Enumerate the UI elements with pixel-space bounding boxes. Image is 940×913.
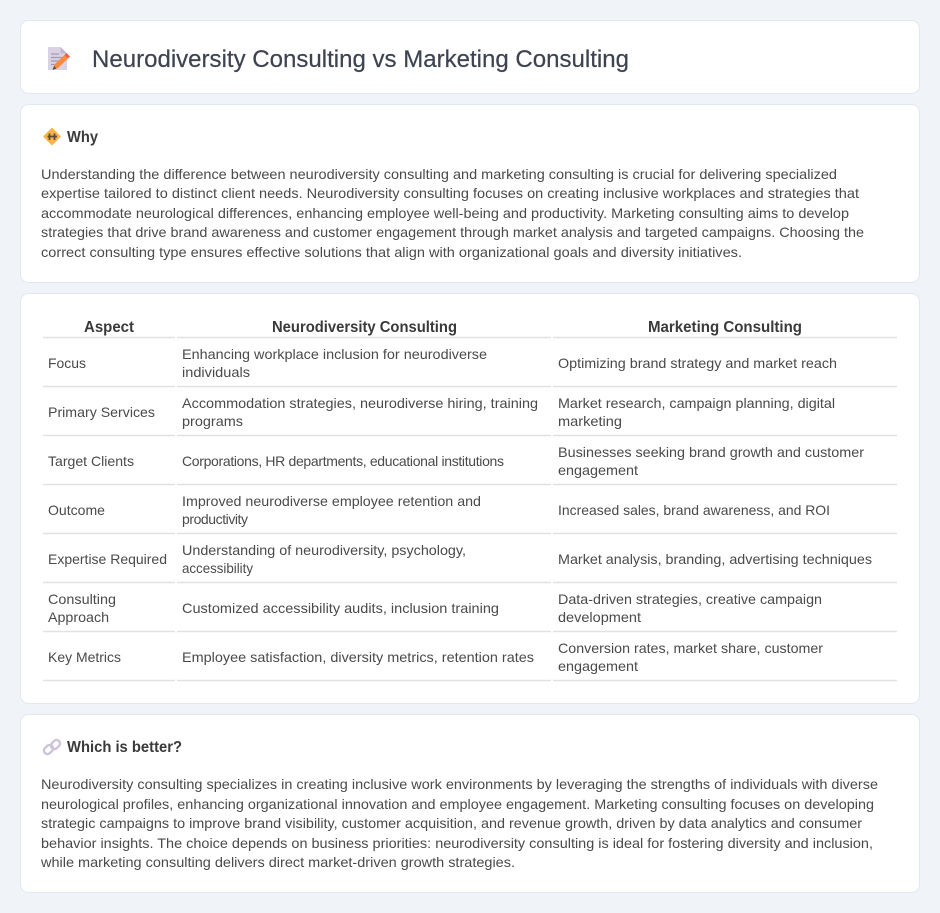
icon: document with pencil <box>48 47 70 70</box>
row: focus <box>48 346 837 380</box>
row: expertise required: accessibility <box>182 560 253 576</box>
row: consulting approach: development <box>558 609 641 625</box>
text block: why paragraph: correct consulting type ensures effective solutions that align with organizational goals and diversity initiatives. <box>41 244 742 260</box>
row: key metrics <box>48 640 823 674</box>
text block: which is better paragraph: neurological profiles, enhancing organizational innovation and employee engagement. Marketing consulting focuses on developing <box>41 796 874 812</box>
panel: which is better <box>20 714 920 892</box>
row: consulting approach: Consulting <box>48 591 116 607</box>
icon: chain link <box>42 738 62 756</box>
row: focus: Focus <box>48 355 86 371</box>
heading: which is better: Which is better? <box>67 739 182 756</box>
row: outcome: Increased sales, brand awareness, and ROI <box>558 502 830 518</box>
row: expertise required: Understanding of neurodiversity, psychology, <box>182 542 466 558</box>
row: key metrics: Conversion rates, market share, customer <box>558 640 823 656</box>
table header row: Aspect <box>84 319 135 336</box>
text block: which is better paragraph: strategic campaigns to improve brand visibility, customer acquisition, and revenue growth, driven by data analytics and consumer <box>41 815 862 831</box>
row: primary services: marketing <box>558 413 622 429</box>
text block: why paragraph: expertise tailored to distinct client needs. Neurodiversity consulting focuses on creating inclusive workplaces and strategies that <box>41 185 859 201</box>
text block: which is better paragraph <box>40 776 878 870</box>
text block: why paragraph: Understanding the difference between neurodiversity consulting and marketing consulting is crucial for delivering specialized <box>41 166 837 182</box>
icon: orange diamond sign <box>44 128 60 144</box>
row: primary services: programs <box>182 413 243 429</box>
row: focus: Enhancing workplace inclusion for neurodiverse <box>182 346 487 362</box>
text block: which is better paragraph: Neurodiversity consulting specializes in creating inclusive work environments by leveraging the strengths of individuals with diverse <box>41 776 878 792</box>
text block: which is better paragraph: while marketing consulting delivers direct market-driven growth strategies. <box>40 854 515 870</box>
text block: why paragraph: accommodate neurological differences, enhancing employee well-being and productivity. Marketing consulting aims to develop <box>41 205 849 221</box>
panel: header <box>20 20 920 94</box>
text block: which is better paragraph: behavior insights. The choice depends on business priorities: neurodiversity consulting is ideal for fostering diversity and inclusion, <box>41 835 873 851</box>
row: focus: individuals <box>182 364 250 380</box>
table header row: Neurodiversity Consulting <box>272 319 457 336</box>
row: target clients: Businesses seeking brand growth and customer <box>558 444 864 460</box>
row: expertise required: Expertise Required <box>48 551 167 567</box>
row: consulting approach <box>48 591 822 625</box>
text block: why paragraph: strategies that drive brand awareness and customer engagement through market analysis and targeted campaigns. Choosing the <box>41 224 864 240</box>
row: outcome: Improved neurodiverse employee retention and <box>182 493 481 509</box>
row: focus: Optimizing brand strategy and market reach <box>558 355 837 371</box>
row: primary services: Accommodation strategies, neurodiverse hiring, training <box>182 395 538 411</box>
row: consulting approach: Data-driven strategies, creative campaign <box>558 591 822 607</box>
table header row <box>84 319 802 336</box>
panel: why <box>20 104 920 282</box>
row: key metrics: engagement <box>558 658 638 674</box>
row: primary services: Market research, campaign planning, digital <box>558 395 835 411</box>
title: Neurodiversity Consulting vs Marketing Consulting <box>92 46 629 73</box>
row: target clients: Target Clients <box>48 453 134 469</box>
row: consulting approach: Approach <box>48 609 109 625</box>
row: expertise required: Market analysis, branding, advertising techniques <box>558 551 872 567</box>
row: consulting approach: Customized accessibility audits, inclusion training <box>182 600 499 616</box>
row: key metrics: Key Metrics <box>48 649 121 665</box>
row: target clients <box>48 444 864 478</box>
row: target clients: engagement <box>558 462 638 478</box>
table header row: Marketing Consulting <box>648 319 802 336</box>
text block: why paragraph <box>41 166 864 260</box>
row: target clients: Corporations, HR departments, educational institutions <box>182 453 504 469</box>
row: outcome: Outcome <box>48 502 105 518</box>
row: outcome: productivity <box>182 511 248 527</box>
row: outcome <box>48 493 830 527</box>
row: primary services <box>48 395 835 429</box>
row: primary services: Primary Services <box>48 404 155 420</box>
panel: comparison table <box>20 294 920 704</box>
row: expertise required <box>48 542 872 576</box>
row: key metrics: Employee satisfaction, diversity metrics, retention rates <box>182 649 534 665</box>
heading: why: Why <box>67 129 98 146</box>
